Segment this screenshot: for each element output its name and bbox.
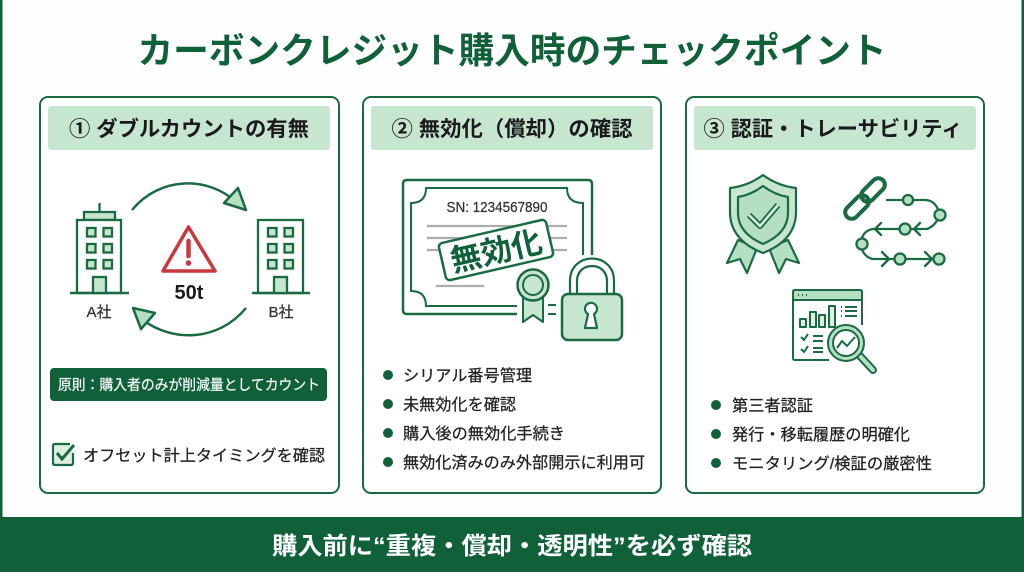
panel: double counting <box>40 97 339 493</box>
label: company B: B社 <box>268 304 294 321</box>
icon: ribbon seal <box>518 270 548 322</box>
icon: shield <box>727 175 799 273</box>
label: 50t: 50t <box>175 282 204 304</box>
panel 2 heading: ② 無効化（償却）の確認 <box>392 118 632 141</box>
panel: certification <box>686 97 984 493</box>
panel 3 heading <box>694 106 976 150</box>
panel 1 heading: ① ダブルカウントの有無 <box>69 117 309 141</box>
list: retirement checks: 未無効化を確認 <box>403 396 516 414</box>
icon: certificate <box>403 180 592 314</box>
icon: monitoring dashboard <box>793 290 873 370</box>
list: retirement checks: 購入後の無効化手続き <box>403 425 565 443</box>
list: certification checks <box>711 397 932 473</box>
icon: traceability path <box>856 195 946 266</box>
callout: principle: 原則：購入者のみが削減量としてカウント <box>58 377 320 394</box>
panel: retirement <box>363 97 661 493</box>
icon: building A <box>70 203 129 293</box>
callout: principle <box>50 368 327 401</box>
icon: checkbox <box>53 444 74 465</box>
footer banner <box>0 517 1024 572</box>
list: retirement checks <box>383 367 645 472</box>
arrow: B to A <box>133 308 246 335</box>
panel 3 heading: ③ 認証・トレーサビリティ <box>704 118 962 141</box>
footer banner: 購入前に“重複・償却・透明性”を必ず確認 <box>272 533 752 560</box>
list: retirement checks: 無効化済みのみ外部開示に利用可 <box>403 454 645 472</box>
panel 2 heading <box>371 106 653 150</box>
stamp: 無効化 <box>447 224 546 279</box>
list: retirement checks: シリアル番号管理 <box>403 367 532 385</box>
title: カーボンクレジット購入時のチェックポイント <box>138 31 886 71</box>
icon: building B <box>252 220 310 293</box>
list: certification checks: 第三者認証 <box>732 397 813 415</box>
label: company A: A社 <box>86 304 112 321</box>
certificate serial number: SN: 1234567890 <box>446 200 548 216</box>
list: certification checks: モニタリング/検証の厳密性 <box>732 455 932 473</box>
list: certification checks: 発行・移転履歴の明確化 <box>732 426 910 444</box>
text: offset timing: オフセット計上タイミングを確認 <box>83 447 325 465</box>
icon: warning <box>163 227 215 271</box>
arrow: A to B <box>132 183 246 210</box>
panel 1 heading <box>48 106 330 150</box>
icon: padlock <box>562 258 622 340</box>
icon: chain link <box>843 176 887 221</box>
